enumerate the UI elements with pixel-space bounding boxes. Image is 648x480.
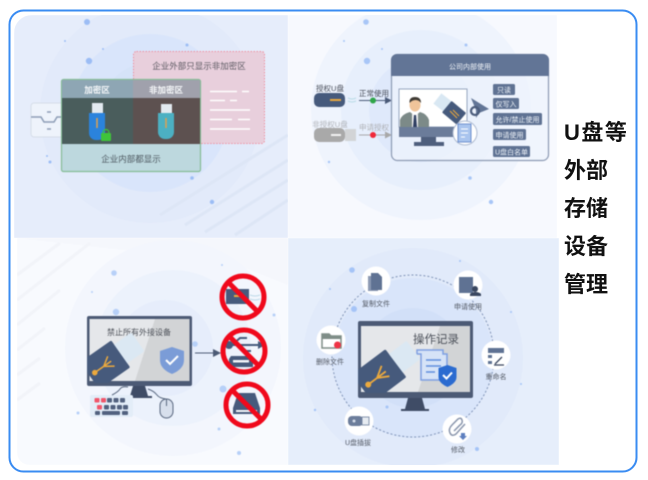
authorised usb [314,83,356,107]
node: request use: 申请使用 [454,302,482,311]
icon: usb stick [360,342,419,393]
node: rename: 重命名 [486,372,506,381]
permission tags: U盘白名单 [495,148,528,156]
side title: 外部 [564,158,608,183]
arrow: request authorisation [359,122,392,138]
authorised usb: 授权U盘 [316,83,344,93]
internal zone box: 非加密区 [149,85,183,95]
icon: plain usb [158,104,174,139]
monitor: block notice: 禁止所有外接设备 [107,327,171,337]
arrow to blocked devices [195,349,221,357]
panel: operation log [288,238,559,468]
permission tags: 申请使用 [496,130,524,140]
permission tags [493,84,542,157]
icon: log document [417,350,456,387]
side title: U盘等 [564,120,628,145]
unauthorised usb: 非授权U盘 [312,119,348,129]
node: plug usb [344,406,374,447]
panel: encrypted zones [14,3,288,238]
node: plug usb: U盘插拔 [345,438,371,447]
arrow: request authorisation: 申请授权 [359,122,389,132]
permission tags: 允许/禁止使用 [496,115,539,124]
unauthorised usb [312,119,356,142]
node: modify [442,414,472,454]
node: modify: 修改 [451,445,465,454]
icon: keyboard [90,395,133,417]
internal zone box [62,80,200,172]
panel: authorised use [310,15,550,221]
node: request use [454,270,482,311]
permission tags: 仅写入 [496,100,516,108]
monitor: operation log: 操作记录 [413,332,459,346]
icon: usb stick [88,333,143,382]
side title: 管理 [564,272,608,297]
permission tags: 只读 [497,86,511,94]
side title: 存储 [564,196,608,221]
internal zone box: 企业内部都显示 [101,154,161,164]
internal use window [391,54,549,160]
internal use window: 公司内部使用 [449,62,491,71]
node: rename [482,340,510,381]
icon: mouse [112,387,173,418]
internal zone box: 加密区 [84,85,110,95]
node: delete file: 删除文件 [316,357,344,366]
icon: blocked hard drive [226,384,268,426]
arrow: normal use: 正常使用 [359,88,389,98]
node: copy file: 复制文件 [362,299,390,308]
monitor with person [399,89,467,146]
switch icon [31,103,66,137]
monitor: block notice [87,316,192,398]
icon: blocked usb drive [222,276,264,318]
panel: block all external devices [17,238,288,465]
external zone box [134,52,264,144]
icon: gear and plane [471,98,489,118]
icon: blocked usb port [223,330,265,372]
arrow: normal use [359,88,392,104]
node: delete file [316,326,346,366]
icon: encrypted usb [89,103,111,141]
icon: usb and document [433,93,477,145]
external zone box: 企业外部只显示非加密区 [152,61,246,71]
side title: 设备 [564,234,608,259]
side title [564,120,628,297]
monitor: operation log [358,321,473,411]
node: copy file [362,266,390,308]
